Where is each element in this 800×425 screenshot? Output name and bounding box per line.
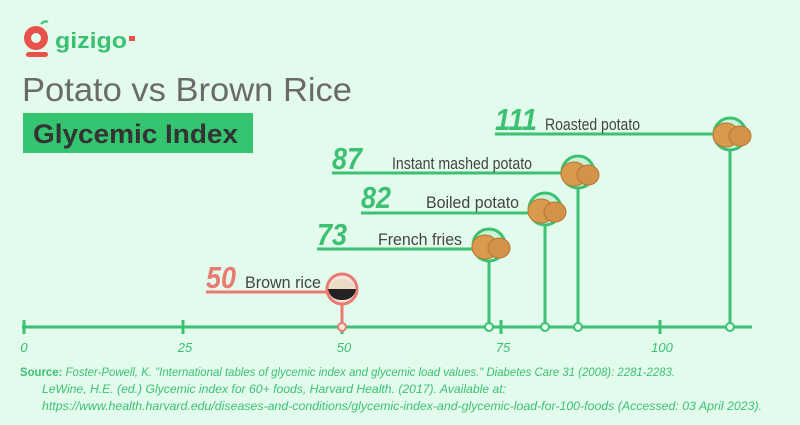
- marker: brown rice 50: [206, 260, 357, 331]
- marker: boiled potato 82: 82: [361, 180, 391, 215]
- marker: boiled potato 82: [361, 180, 566, 331]
- axis labels: 25: [177, 340, 193, 355]
- marker: instant mashed potato 87: Instant mashed potato: [392, 154, 532, 173]
- marker: french fries 73: French fries: [378, 230, 462, 249]
- logo: gizigo: [55, 28, 127, 53]
- marker: french fries 73: [317, 217, 510, 331]
- marker: brown rice 50: Brown rice: [245, 273, 321, 292]
- axis labels: [20, 340, 674, 355]
- marker: roasted potato 111: 111: [495, 102, 537, 137]
- source text: [20, 365, 762, 413]
- marker: french fries 73: 73: [317, 217, 347, 252]
- marker: instant mashed potato 87: 87: [332, 141, 364, 176]
- marker: roasted potato 111: Roasted potato: [545, 115, 640, 134]
- source text: Source: Foster-Powell, K. "International tables of glycemic index and glycemic load values." Diabetes Care 31 (2008): 2281-2283.: [20, 365, 675, 379]
- axis labels: 100: [651, 340, 674, 355]
- subtitle badge: Glycemic Index: [33, 119, 238, 149]
- source text: https://www.health.harvard.edu/diseases-and-conditions/glycemic-index-and-glycemic-load-for-100-foods (Accessed: 03 April 2023).: [42, 399, 762, 413]
- title: Potato vs Brown Rice: [22, 71, 352, 108]
- source text: LeWine, H.E. (ed.) Glycemic index for 60+ foods, Harvard Health. (2017). Available at:: [42, 382, 506, 396]
- marker: boiled potato 82: Boiled potato: [426, 193, 519, 212]
- axis labels: 50: [337, 340, 352, 355]
- axis: [22, 320, 752, 334]
- subtitle badge: [23, 113, 253, 153]
- marker: brown rice 50: 50: [206, 260, 236, 295]
- axis labels: 0: [20, 340, 28, 355]
- marker: roasted potato 111: [495, 102, 751, 331]
- marker: instant mashed potato 87: [332, 141, 599, 331]
- axis labels: 75: [496, 340, 511, 355]
- logo: [24, 21, 135, 57]
